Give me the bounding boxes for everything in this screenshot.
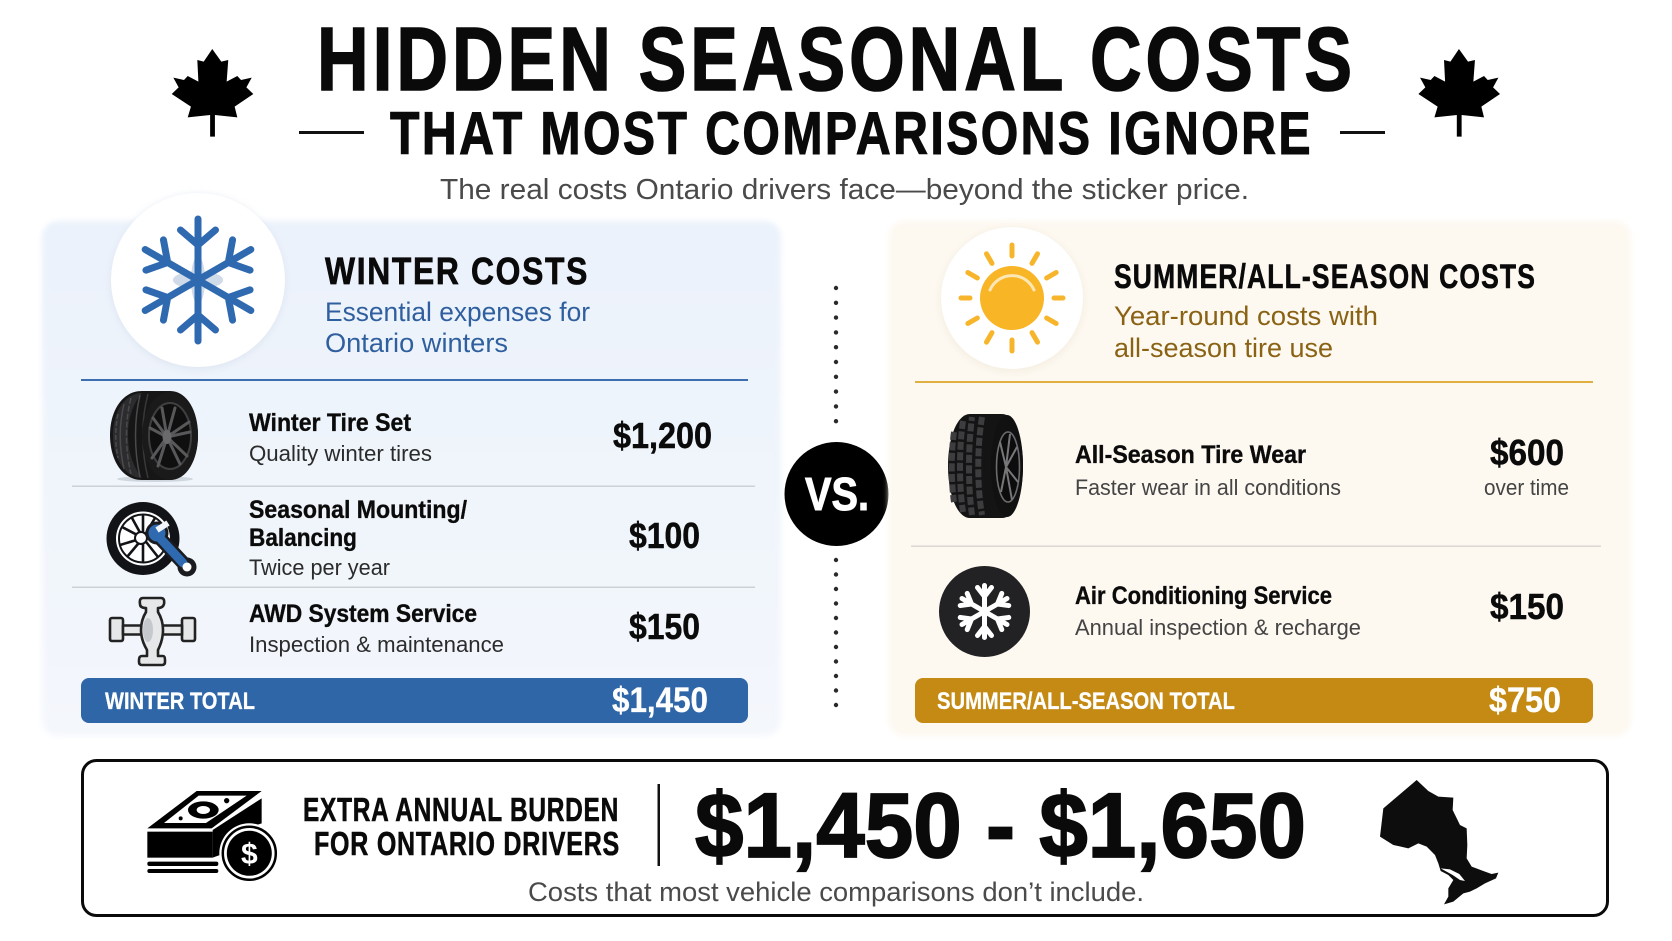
row label: Seasonal Mounting/ <box>249 496 467 524</box>
icon: winter snowflake <box>111 193 285 367</box>
VS badge: VS. <box>805 468 869 520</box>
vertical separator <box>658 784 660 866</box>
icon: left maple leaf <box>172 49 253 137</box>
panel: summer and all-season costs <box>889 221 1631 736</box>
row: all-season tire wear <box>948 414 1569 518</box>
dotted line top <box>834 288 838 432</box>
total value: $1,450 <box>612 681 708 720</box>
winter rule <box>81 379 748 381</box>
total value: $750 <box>1489 681 1561 720</box>
row price: $100 <box>629 515 700 556</box>
row label: Balancing <box>249 524 357 552</box>
row divider <box>911 546 1601 547</box>
winter heading: WINTER COSTS <box>325 251 589 293</box>
row description: Annual inspection & recharge <box>1075 615 1361 640</box>
heading line one: HIDDEN SEASONAL COSTS <box>317 10 1356 110</box>
winter icon disc shadow <box>111 195 285 369</box>
row description: Twice per year <box>249 555 390 580</box>
heading dash left <box>299 131 364 134</box>
winter subheading: Essential expenses for <box>325 297 590 327</box>
cost range: $1,450 - $1,650 <box>695 775 1306 877</box>
row price: $150 <box>1490 586 1564 627</box>
icon: right maple leaf <box>1418 49 1500 137</box>
VS badge <box>784 442 888 546</box>
icon: air conditioning snowflake <box>939 566 1030 657</box>
icon: wheel and wrench <box>106 502 196 576</box>
row label: Air Conditioning Service <box>1075 582 1332 610</box>
summer subheading: all-season tire use <box>1114 333 1333 363</box>
heading line two: THAT MOST COMPARISONS IGNORE <box>390 100 1313 167</box>
summer heading: SUMMER/ALL-SEASON COSTS <box>1114 258 1536 296</box>
row: air conditioning service <box>939 566 1564 657</box>
row label: Winter Tire Set <box>249 409 412 437</box>
winter subheading <box>325 297 590 358</box>
summer icon disc shadow <box>941 229 1083 371</box>
row: winter tire set <box>110 391 712 482</box>
row: seasonal mounting <box>106 496 700 580</box>
total label: SUMMER/ALL-SEASON TOTAL <box>937 688 1235 715</box>
burden label <box>303 791 620 862</box>
row description: Quality winter tires <box>249 441 432 466</box>
dotted line bottom <box>834 560 838 712</box>
icon: winter tire <box>110 391 198 482</box>
row: AWD system service <box>110 598 700 665</box>
icon: money stack with coin: $ <box>241 838 258 871</box>
row price: $600 <box>1490 432 1564 473</box>
summer total bar <box>915 678 1593 723</box>
total label: WINTER TOTAL <box>105 688 255 715</box>
row label <box>249 496 467 552</box>
panel: winter costs <box>42 193 781 736</box>
icon: all-season tire <box>948 414 1023 518</box>
heading dash right <box>1340 131 1385 134</box>
VS divider <box>784 288 888 712</box>
burden label: FOR ONTARIO DRIVERS <box>314 825 620 862</box>
winter panel background <box>42 221 781 736</box>
summer subheading: Year-round costs with <box>1114 301 1378 331</box>
subtitle: The real costs Ontario drivers face—beyond the sticker price. <box>440 174 1249 206</box>
row divider <box>72 586 755 588</box>
title block <box>172 10 1500 206</box>
icon: Ontario map <box>1380 780 1498 904</box>
summer subheading <box>1114 301 1378 363</box>
winter subheading: Ontario winters <box>325 328 508 358</box>
callout note: Costs that most vehicle comparisons don’t include. <box>528 877 1144 907</box>
row description: Faster wear in all conditions <box>1075 475 1341 500</box>
icon: AWD drivetrain <box>110 598 195 665</box>
row label: All-Season Tire Wear <box>1075 441 1306 469</box>
burden label: EXTRA ANNUAL BURDEN <box>303 791 619 828</box>
row price: $150 <box>629 606 700 647</box>
row price: $1,200 <box>613 415 712 456</box>
icon: money stack with coin <box>147 791 279 883</box>
summer panel background <box>889 221 1631 736</box>
summer rule <box>915 381 1593 383</box>
winter total bar <box>81 678 748 723</box>
icon: sun <box>941 227 1083 369</box>
callout: extra annual burden <box>82 760 1608 916</box>
price note: over time <box>1484 475 1569 500</box>
row label: AWD System Service <box>249 600 477 628</box>
callout frame <box>82 760 1608 916</box>
row divider <box>72 486 755 487</box>
row description: Inspection & maintenance <box>249 632 504 657</box>
